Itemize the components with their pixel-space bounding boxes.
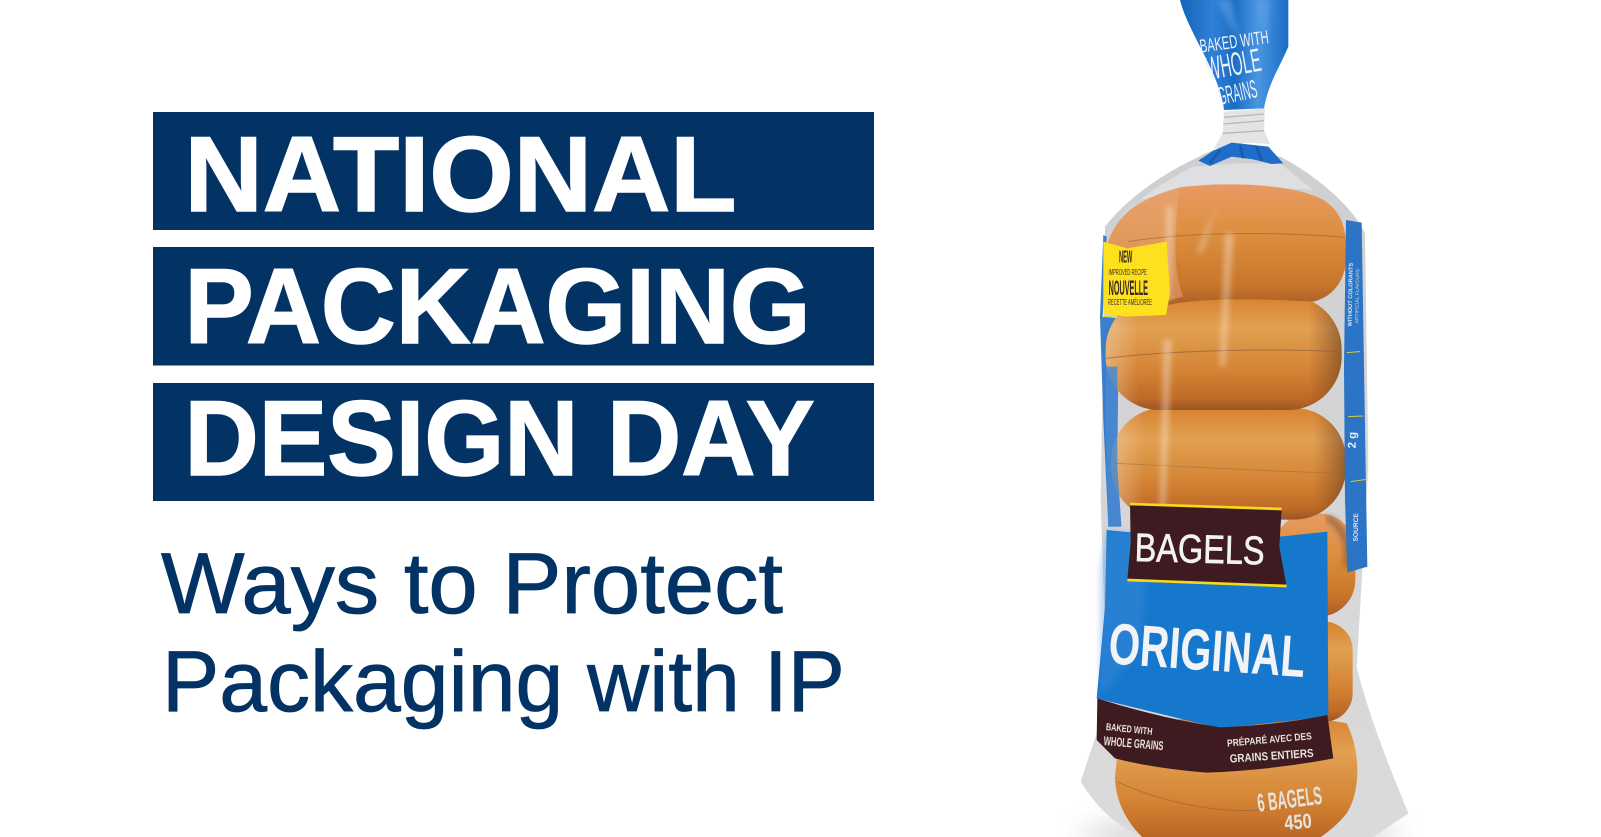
subtitle (161, 536, 845, 730)
twist tie (1213, 108, 1270, 149)
brown band label: GRAINS ENTIERS (1229, 747, 1314, 766)
title bar: Packaging: PACKAGING (184, 246, 810, 366)
right side strip: ARTIFICIAL FLAVOURS (1354, 268, 1361, 323)
right side strip (1344, 220, 1367, 573)
pack size (1256, 782, 1324, 835)
ground shadow (1080, 822, 1400, 837)
brown BAGELS banner (1127, 503, 1287, 587)
bagel 3 (1111, 408, 1346, 520)
title block (153, 112, 874, 501)
left side strip (1100, 235, 1121, 527)
ORIGINAL wordmark: ORIGINAL (1107, 611, 1307, 690)
title bar: National: NATIONAL (184, 114, 736, 234)
yellow sticker: IMPROVED RECIPE (1108, 267, 1147, 277)
bagel 1 (1107, 184, 1347, 310)
yellow sticker: NOUVELLE (1109, 276, 1148, 300)
brown band label: WHOLE GRAINS (1103, 734, 1164, 753)
tail of bag: BAKED WITH (1198, 26, 1270, 57)
yellow sticker (1103, 242, 1170, 317)
brown band label: PRÉPARÉ AVEC DES (1226, 729, 1313, 750)
brown band label: BAKED WITH (1105, 722, 1153, 738)
bagel 4 (1273, 513, 1355, 617)
right side strip: 2 g (1347, 432, 1359, 448)
right side strip: WITHOUT COLORANTS (1348, 263, 1355, 327)
tail of bag (1180, 0, 1288, 111)
bagel 6 (1115, 715, 1357, 837)
left strip lower overlay (1106, 367, 1121, 527)
brown BAGELS banner: BAGELS (1134, 526, 1265, 573)
brown band label (1097, 698, 1333, 773)
bagel 2 (1106, 296, 1342, 410)
bag top highlight (1117, 163, 1313, 220)
right side strip: SOURCE (1353, 513, 1360, 542)
bag film (1081, 150, 1408, 837)
bagels stack (1106, 184, 1357, 837)
title bar: Design Day: DESIGN DAY (184, 378, 814, 498)
subtitle: Packaging with IP (162, 634, 845, 730)
pack size: 450 (1283, 810, 1313, 835)
pack size: 6 BAGELS (1256, 782, 1324, 818)
bagel 5 (1293, 622, 1353, 722)
film highlights (1158, 203, 1233, 567)
product: bagel bag (1080, 0, 1408, 837)
tail of bag: WHOLE (1203, 41, 1264, 87)
tail of bag: GRAINS (1215, 75, 1260, 111)
blue ruffle (1198, 143, 1283, 166)
yellow sticker: RECETTE AMÉLIORÉE (1108, 297, 1152, 307)
subtitle: Ways to Protect (161, 536, 783, 632)
blue label panel (1097, 530, 1328, 728)
yellow sticker: NEW (1119, 247, 1133, 267)
